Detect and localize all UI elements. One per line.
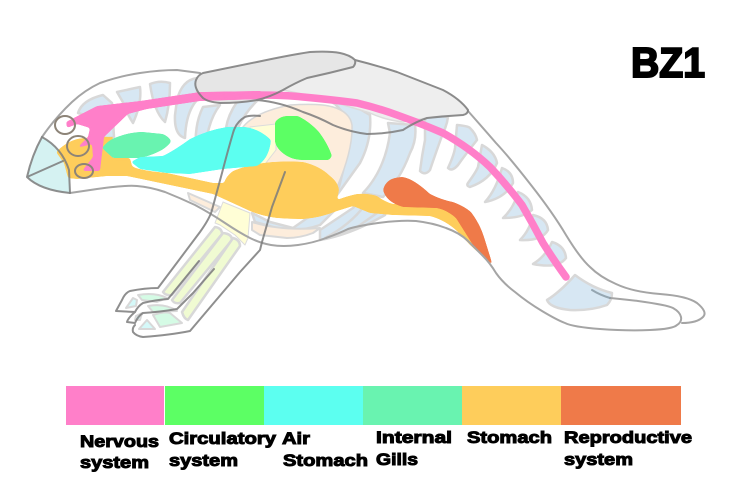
legend colour bar [66,386,681,425]
legend labels: Air [282,429,310,448]
air stomach [131,127,271,174]
logo: BZ1 [631,39,705,86]
head sockets [55,116,93,178]
claw bones [138,294,182,327]
circulatory organ [275,116,332,160]
legend labels: system [169,451,238,470]
ribs and vertebrae [78,78,612,310]
claw tips [126,298,155,329]
pale yellow pelvis [215,124,276,245]
legend labels: Nervous [80,432,159,451]
legend labels: Internal [376,428,452,447]
legend labels [80,428,692,472]
legend labels: Circulatory [169,429,277,448]
legend labels: Stomach [283,451,368,470]
nervous system brain [66,91,262,171]
legend labels: Gills [376,450,418,469]
nervous system spinal cord [255,95,566,277]
legend labels: Stomach [467,428,552,447]
internal gills [102,132,171,158]
shell and limb dark outlines [27,52,610,337]
shell plate front [195,52,355,103]
body outline [42,70,705,330]
legend labels: system [564,450,633,469]
legend labels: Reproductive [564,428,692,447]
peach ventral plates [188,193,320,238]
shell plate rear [283,60,468,122]
legend labels: system [80,453,149,472]
reproductive organ [383,177,493,266]
limb bones [163,227,240,320]
beak [27,137,70,193]
stomach digestive tract [56,137,492,265]
peach organ sac [243,104,352,187]
creature anatomy diagram [27,52,705,337]
